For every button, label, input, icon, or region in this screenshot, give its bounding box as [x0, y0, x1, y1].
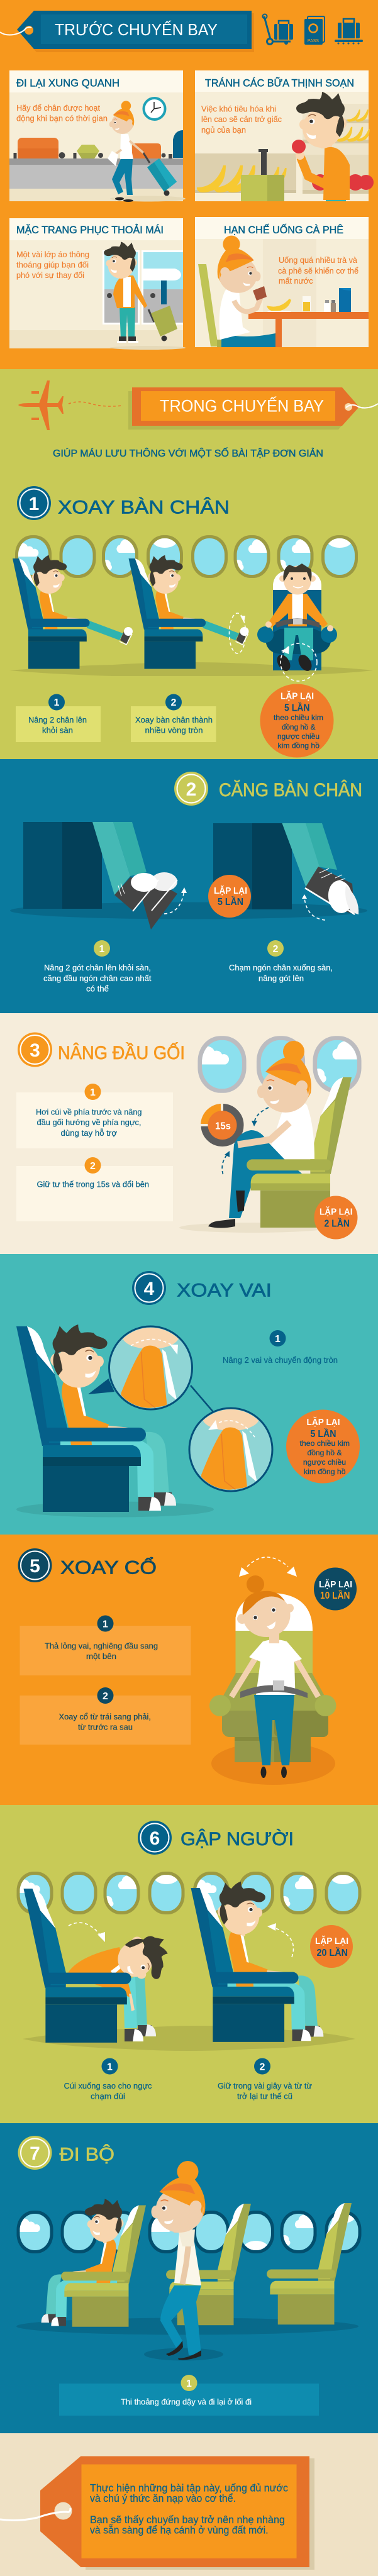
step 2: 2 [273, 944, 279, 955]
title tag: Trước chuyến bay [0, 11, 254, 52]
heading: exercise 3 [18, 1033, 185, 1067]
heading: exercise 4 [132, 1271, 272, 1305]
callout: repeat 10 times [314, 1567, 357, 1610]
section: closing tag [0, 2433, 378, 2576]
heading: HẠN CHẾ UỐNG CÀ PHÊ [224, 223, 343, 236]
tag shadow [86, 2458, 314, 2570]
step 1 [59, 2375, 319, 2416]
heading: exercise 3: NÂNG ĐẦU GỐI [58, 1042, 185, 1063]
step 1: Hơi cúi về phía trước và nâng [36, 1107, 142, 1117]
subtitle: GIÚP MÁU LƯU THÔNG VỚI MỘT SỐ BÀI TẬP ĐƠN GIẢN [53, 448, 323, 459]
dashed arrow up [164, 887, 187, 914]
text block: lên cao sẽ cản trở giấc [201, 114, 282, 124]
heading: exercise 1: XOAY BÀN CHÂN [58, 497, 230, 518]
step 1: 1 [54, 697, 60, 708]
text block [16, 103, 108, 123]
magnifier tail and connector [88, 1379, 213, 1412]
seat with man bending forward [24, 1889, 172, 2043]
section: exercise 2 [0, 759, 378, 1013]
dashed arrows toward chest [222, 1108, 269, 1174]
seat with man [16, 1324, 176, 1512]
step 1: khỏi sàn [42, 726, 73, 735]
step 1: Thi thoảng đứng dậy và đi lại ở lối đi [121, 2397, 252, 2406]
green box and post [241, 149, 284, 201]
callout: repeat 2 times [314, 1196, 357, 1239]
text block: mất nước [279, 276, 313, 286]
windows row [14, 2208, 361, 2256]
windows row [12, 533, 358, 578]
callout: repeat 5 times: kim đồng hồ [278, 741, 320, 750]
step 2: 2 [260, 2062, 265, 2073]
chair [198, 264, 218, 347]
dashed rotation arrow at feet [281, 643, 317, 681]
text block [201, 104, 282, 135]
seat, front view [209, 1593, 336, 1762]
step 1: đầu gối hướng về phía ngực, [36, 1118, 141, 1127]
panel: comfortable clothes [9, 218, 186, 350]
dashed rotation arrow at ankle [229, 613, 245, 653]
closing text: Bạn sẽ thấy chuyến bay trở nên nhẹ nhàng [90, 2514, 285, 2526]
floor shadow [23, 2026, 355, 2051]
section: exercise 4 [0, 1254, 378, 1535]
step 2 [218, 2058, 312, 2101]
step 1 [223, 1330, 338, 1365]
step 2: nâng gót lên [258, 974, 304, 983]
callout: repeat 20 times: LẶP LẠI [315, 1936, 348, 1946]
dashed neck arrow [239, 1557, 297, 1577]
timer: 15s: 15s [215, 1121, 231, 1132]
heading: exercise 1 [17, 486, 230, 520]
panel: avoid heavy meals [195, 70, 374, 201]
heading: exercise 2: 2 [186, 779, 196, 800]
callout: repeat 5 times: ngược chiều [303, 1458, 346, 1467]
seat with passenger, front view [240, 0, 337, 674]
step 2: Chạm ngón chân xuống sàn, [229, 963, 333, 972]
floor shadow [9, 662, 373, 676]
icon: passport: PASS [308, 39, 319, 43]
heading: exercise 3: 3 [30, 1040, 40, 1061]
heading: exercise 6: 6 [150, 1828, 160, 1849]
closing text [90, 2482, 288, 2536]
person: woman tilting head [231, 1575, 318, 1778]
floor shadow [211, 1742, 335, 1785]
closing tag [0, 2457, 309, 2567]
title tag: Trong chuyến bay: TRONG CHUYẾN BAY [160, 396, 324, 415]
step 1: Nâng 2 chân lên [28, 715, 87, 724]
step 2: Xoay cổ từ trái sang phải, [59, 1712, 151, 1721]
section: exercise 3 [0, 1013, 378, 1254]
callout: repeat 10 times: 10 LẦN [320, 1589, 350, 1601]
title tag: Trước chuyến bay: TRƯỚC CHUYẾN BAY [55, 20, 218, 39]
step 2 [229, 940, 333, 983]
empty seat 2 [166, 2204, 251, 2325]
callout: repeat 5 times: theo chiều kim [299, 1439, 350, 1448]
dashed arrow up [267, 1923, 294, 1957]
shelves [195, 104, 369, 194]
step 2: nhiều vòng tròn [145, 726, 203, 735]
windows [194, 1036, 367, 1093]
step 1: 1 [107, 2062, 113, 2073]
heading: TRÁNH CÁC BỮA THỊNH SOẠN [205, 77, 354, 89]
step 1: căng đầu ngón chân cao nhất [43, 974, 152, 983]
section: exercise 5 [0, 1535, 378, 1805]
icon: luggage cart [263, 14, 293, 45]
floor shadow [16, 2318, 359, 2334]
step 2: Xoay bàn chân thành [135, 715, 213, 724]
step 2: từ trước ra sau [78, 1722, 133, 1732]
text block [278, 255, 359, 286]
section: before the flight [0, 0, 378, 369]
panel: limit coffee [195, 217, 369, 347]
heading: exercise 2: CĂNG BÀN CHÂN [219, 780, 362, 801]
person: woman with suitcase [108, 101, 186, 202]
seat with man [42, 2199, 146, 2327]
callout: repeat 2 times: 2 LẦN [325, 1218, 350, 1229]
step 2: 2 [171, 697, 177, 708]
panel: moving around [9, 70, 186, 202]
step 2: trở lại tư thế cũ [237, 2092, 292, 2101]
table items [267, 288, 351, 313]
callout: repeat 5 times [260, 684, 333, 757]
step 2: 2 [103, 1691, 108, 1702]
callout: repeat 5 times: đồng hồ & [307, 1448, 342, 1457]
text block: động khi bạn có thời gian [16, 113, 108, 123]
callout: repeat 5 times: kim đồng hồ [304, 1467, 346, 1476]
callout: repeat 5 times: theo chiều kim [274, 713, 323, 722]
timer: 15s [199, 1102, 240, 1143]
closing text: và sẵn sàng để hạ cánh ở vùng đất mới. [90, 2524, 268, 2536]
section: exercise 7 [0, 2123, 378, 2433]
step 2 [131, 694, 216, 742]
step 1: 1 [90, 1087, 96, 1098]
step 1 [16, 1084, 173, 1148]
icon: bag on conveyor [335, 19, 363, 44]
step 1: Nâng 2 gót chân lên khỏi sàn, [44, 963, 151, 972]
dashed arrow down [69, 1923, 105, 1942]
dashed arrow up [302, 894, 325, 920]
step 1 [16, 694, 101, 742]
step 2: Giữ trong vài giây và từ từ [218, 2081, 312, 2090]
section: exercise 6 [0, 1805, 378, 2123]
empty seat 3 [267, 2203, 352, 2324]
callout: repeat 5 times: 5 LẦN [218, 896, 243, 908]
table [248, 312, 369, 347]
section: in flight, exercise 1 [0, 0, 378, 759]
title tag: Trong chuyến bay [128, 387, 378, 430]
red apples [312, 174, 374, 191]
callout: repeat 5 times [208, 875, 251, 918]
closing text: và chú ý thức ăn nạp vào cơ thể. [90, 2492, 236, 2504]
person: woman drinking [217, 236, 275, 347]
callout: repeat 20 times [310, 1925, 353, 1968]
step 1 [20, 1615, 191, 1675]
callout: repeat 5 times [286, 1410, 360, 1483]
text block: cà phê sẽ khiến cơ thể [278, 266, 359, 275]
callout: repeat 5 times: ngược chiều [277, 732, 320, 741]
step 1: có thể [86, 984, 109, 994]
step 1: một bên [86, 1652, 116, 1661]
step 1: 1 [103, 1619, 108, 1630]
heading: exercise 7: ĐI BỘ [59, 2143, 114, 2165]
step 1: 1 [275, 1334, 281, 1345]
closing text: Thực hiện những bài tập này, uống đủ nước [90, 2482, 288, 2494]
callout: repeat 20 times: 20 LẦN [317, 1946, 348, 1958]
step 1: chạm đùi [91, 2092, 125, 2101]
text block: Việc khó tiêu hóa khi [201, 104, 276, 113]
callout: repeat 5 times: LẶP LẠI [281, 691, 314, 702]
step 1 [64, 2058, 152, 2101]
text block [16, 250, 89, 280]
heading: exercise 5: XOAY CỔ [60, 1557, 157, 1579]
step 1: dùng tay hỗ trợ [60, 1128, 117, 1138]
seat with passenger, side view 2 [128, 555, 249, 669]
callout: repeat 5 times: đồng hồ & [282, 723, 316, 731]
text block: Hãy để chân được hoạt [16, 103, 100, 113]
heading: exercise 5: 5 [30, 1556, 40, 1577]
luggage on belt [14, 130, 183, 158]
step 1: Thả lỏng vai, nghiêng đầu sang [45, 1641, 158, 1650]
step 2 [20, 1687, 191, 1745]
bananas [197, 109, 370, 192]
person: man with apple [292, 92, 350, 201]
seat base and raised heel [213, 823, 359, 914]
heading: exercise 6: GẬP NGƯỜI [181, 1829, 294, 1850]
text block: ngủ của bạn [201, 125, 246, 135]
person: man in layers with suitcase [104, 242, 186, 350]
text block: Một vài lớp áo thông [16, 250, 89, 259]
text block: thoáng giúp bạn đối [16, 260, 89, 269]
callout: repeat 5 times: LẶP LẠI [214, 886, 247, 896]
airport windows [9, 250, 183, 348]
step 1: 1 [99, 944, 105, 955]
dashed flight path [69, 402, 121, 406]
seat with man upright [191, 1882, 323, 2042]
callout: repeat 2 times: LẶP LẠI [320, 1206, 352, 1218]
callout: repeat 10 times: LẶP LẠI [319, 1579, 352, 1590]
text block: phó với sự thay đổi [16, 270, 84, 280]
callout: repeat 5 times: 5 LẦN [311, 1428, 336, 1440]
floor shadow [16, 1502, 214, 1517]
step 1: Cúi xuống sao cho ngực [64, 2081, 152, 2090]
heading: exercise 4: 4 [144, 1279, 155, 1299]
heading: exercise 2 [174, 772, 362, 806]
icon: clock [143, 98, 165, 119]
windows row [14, 1869, 361, 1914]
background: orange [0, 0, 378, 369]
seat with passenger, side view 1 [13, 555, 133, 669]
airplane icon [18, 380, 64, 430]
person: woman walking [151, 2161, 205, 2360]
magnifier: shoulder down, arrow left [189, 1406, 272, 1494]
callout: repeat 5 times: 5 LẦN [284, 702, 309, 713]
step 1: Nâng 2 vai và chuyển động tròn [223, 1355, 338, 1365]
heading: exercise 5 [18, 1548, 157, 1582]
floor shadow [179, 1223, 328, 1233]
icon: passport [304, 16, 325, 45]
step 2 [16, 1157, 173, 1221]
heading: exercise 7: 7 [30, 2143, 40, 2164]
heading: exercise 4: XOAY VAI [177, 1280, 272, 1301]
step 1 [43, 940, 152, 994]
heading: ĐI LẠI XUNG QUANH [16, 77, 120, 89]
callout: repeat 5 times: LẶP LẠI [307, 1417, 340, 1428]
step 1: 1 [186, 2379, 192, 2389]
step 2: Giữ tư thế trong 15s và đổi bên [36, 1180, 149, 1189]
shadow under walking woman [144, 2348, 223, 2361]
heading: exercise 6 [138, 1821, 294, 1855]
seat base and raised toes [23, 822, 177, 930]
floor shadow [10, 902, 367, 919]
step 2: 2 [90, 1161, 96, 1172]
seat and woman raising knee [208, 1041, 352, 1228]
conveyor belt [9, 158, 183, 201]
heading: exercise 7 [18, 2136, 114, 2170]
heading: MẶC TRANG PHỤC THOẢI MÁI [16, 224, 164, 236]
heading: exercise 1: 1 [29, 494, 39, 514]
magnifier: shoulder up, arrow right [109, 1324, 192, 1412]
text block: Uống quá nhiều trà và [279, 255, 358, 265]
